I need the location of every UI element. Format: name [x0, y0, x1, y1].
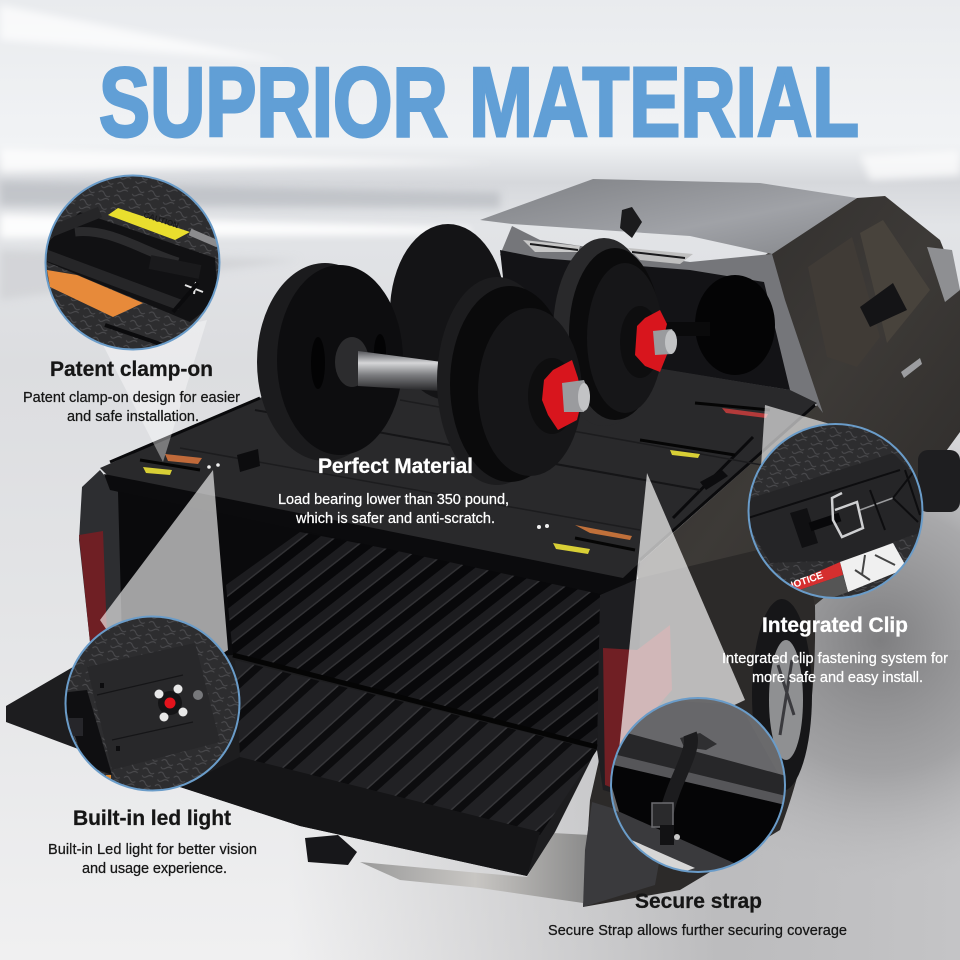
door handle: [901, 358, 922, 378]
text: integrated clip: [722, 614, 948, 686]
rear dumbbell right plates: [553, 238, 677, 426]
text: secure strap: Secure Strap allows further securing coverage: [548, 923, 847, 939]
tonneau cover: [100, 318, 817, 594]
truck cab side body: [637, 196, 960, 640]
rear window: [500, 250, 790, 390]
text: built-in led light: Built-in Led light for better vision: [48, 842, 257, 858]
tailgate lip: [180, 757, 540, 876]
beam: clamp: [103, 320, 207, 462]
rear wheel: [752, 599, 812, 791]
text: perfect material: Perfect Material: [318, 455, 473, 478]
truck: [6, 179, 960, 907]
rear corner panel: [583, 802, 665, 907]
rear weights seen through window: [660, 275, 775, 375]
text: patent clamp-on: Patent clamp-on design for easier: [23, 390, 240, 406]
text: perfect material: Load bearing lower than 350 pound,: [278, 492, 509, 508]
cab window rear: [860, 220, 930, 343]
text: perfect material: [278, 455, 509, 527]
cover fittings: [140, 403, 770, 554]
text: patent clamp-on: [23, 358, 240, 425]
tailgate surface ribs: [235, 660, 597, 835]
text: built-in led light: [48, 807, 257, 877]
side mirror: [860, 283, 907, 327]
bumper: [360, 833, 590, 903]
text: built-in led light: and usage experience.: [82, 861, 227, 877]
callout circle: clip: NOTICE: [785, 570, 825, 593]
callout circle: clamp: [46, 176, 220, 350]
beam: strap: [618, 473, 745, 760]
far floor ribs: [226, 532, 602, 747]
left bed side: [79, 470, 122, 642]
far left plate: [390, 224, 506, 400]
right tail light: [603, 625, 672, 790]
front tire: [918, 450, 960, 512]
beam: clip: [760, 405, 830, 482]
text: integrated clip: more safe and easy install.: [752, 670, 923, 686]
bulkhead line: [233, 655, 597, 747]
front dumbbell left plate: [257, 263, 403, 461]
text: integrated clip: Integrated Clip: [762, 614, 908, 637]
right pillar: [597, 578, 640, 800]
text: secure strap: [548, 890, 847, 939]
text: integrated clip: Integrated clip fastening system for: [722, 651, 948, 667]
rear window surround: [500, 226, 823, 413]
callout circle: led: [60, 616, 240, 790]
left tail light: [79, 531, 107, 642]
far mirror: [927, 247, 960, 302]
high mount brake light: [523, 240, 693, 264]
light beams: [100, 320, 830, 760]
cab window front: [808, 237, 880, 367]
dumbbells: [257, 224, 775, 485]
truck roof: [480, 179, 857, 254]
front bar: [358, 351, 442, 391]
callout circle: clamp: CAUTION: [142, 210, 180, 230]
text: perfect material: which is safer and anti-scratch.: [295, 511, 495, 527]
text: patent clamp-on: Patent clamp-on: [50, 358, 213, 381]
antenna: [620, 207, 642, 238]
callout circle: strap: [605, 698, 790, 880]
callout circle: clip: [745, 424, 930, 610]
tailgate: [6, 655, 597, 876]
text: secure strap: Secure strap: [635, 890, 762, 913]
lower body and fender: [583, 540, 815, 907]
text: patent clamp-on: and safe installation.: [67, 409, 199, 425]
front dumbbell right plates: [437, 277, 590, 485]
beam: led: [100, 470, 228, 697]
text: built-in led light: Built-in led light: [73, 807, 231, 830]
bed back wall: [110, 482, 623, 750]
hitch: [305, 835, 357, 865]
